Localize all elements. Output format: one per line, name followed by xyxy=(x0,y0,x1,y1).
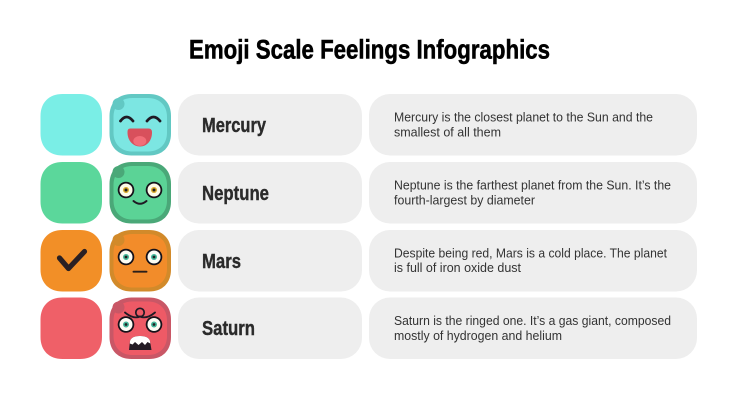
icon: smiling emoji xyxy=(110,162,171,224)
name: Saturn: Saturn xyxy=(202,318,255,340)
name: Mars: Mars xyxy=(202,251,241,273)
row: Saturn xyxy=(40,298,697,359)
icon: laughing emoji xyxy=(110,94,171,156)
description: Saturn: mostly of hydrogen and helium xyxy=(394,328,562,343)
color swatch: red xyxy=(40,298,102,359)
label panel: Mars xyxy=(178,230,362,292)
icon: neutral emoji xyxy=(110,230,171,292)
label panel: Neptune xyxy=(178,162,362,224)
row: Mars xyxy=(40,230,697,292)
description: Saturn: Saturn is the ringed one. It’s a gas giant, composed xyxy=(394,313,671,328)
description panel: Saturn xyxy=(369,298,697,359)
name: Mercury: Mercury xyxy=(202,115,267,137)
label panel: Saturn xyxy=(178,298,362,359)
description panel: Neptune xyxy=(369,162,697,224)
color swatch: orange with check xyxy=(40,230,102,292)
label panel: Mercury xyxy=(178,94,362,156)
color swatch: green xyxy=(40,162,102,224)
row: Mercury xyxy=(40,94,697,156)
title: Emoji Scale Feelings Infographics xyxy=(189,34,550,64)
description: Mars: Despite being red, Mars is a cold place. The planet xyxy=(394,246,667,261)
icon: angry emoji xyxy=(110,298,171,359)
description: Neptune: Neptune is the farthest planet from the Sun. It’s the xyxy=(394,177,671,192)
color swatch: cyan xyxy=(40,94,102,156)
description: Mars: is full of iron oxide dust xyxy=(394,260,521,275)
name: Neptune: Neptune xyxy=(202,183,269,205)
icon: check mark xyxy=(60,252,84,268)
description: Mercury: Mercury is the closest planet to the Sun and the xyxy=(394,110,653,125)
description panel: Mercury xyxy=(369,94,697,156)
description: Mercury: smallest of all them xyxy=(394,125,501,140)
description: Neptune: fourth-largest by diameter xyxy=(394,192,536,207)
row: Neptune xyxy=(40,162,697,224)
description panel: Mars xyxy=(369,230,697,292)
